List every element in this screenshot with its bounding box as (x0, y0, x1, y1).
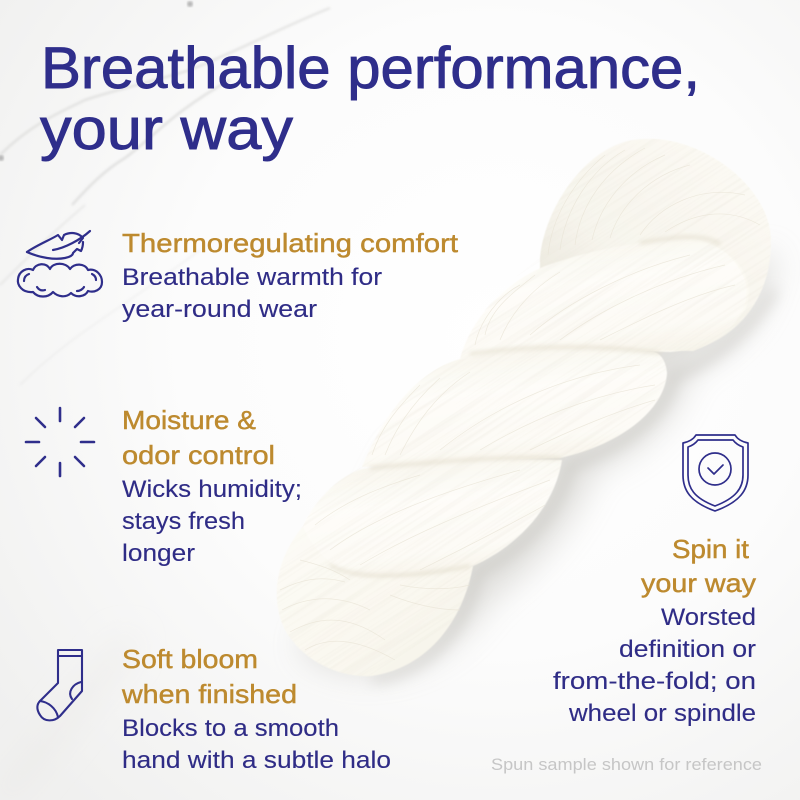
heading: spin it your way: your way (641, 568, 756, 598)
skein shadow (300, 250, 775, 673)
skein fibre strands (280, 148, 760, 660)
heading: soft bloom: when finished (121, 679, 297, 709)
skein right wrap (600, 239, 749, 352)
skein fibre texture (402, 296, 596, 421)
text: soft bloom body: hand with a subtle halo (122, 747, 391, 774)
text: spin it body (553, 604, 756, 727)
text: thermoregulating body: year-round wear (122, 296, 317, 323)
skein top back loop (540, 139, 771, 350)
heading: soft bloom (121, 644, 297, 709)
heading: soft bloom: Soft bloom (122, 644, 258, 674)
title (40, 36, 700, 162)
skein crease shadows (330, 237, 720, 576)
heading: spin it your way: Spin it (672, 534, 750, 564)
heading: thermoregulating comfort: Thermoregulating comfort (122, 228, 459, 258)
skein contact shadow (372, 290, 775, 680)
icon: shield with check (683, 435, 748, 511)
heading: moisture and odor control: odor control (122, 440, 275, 470)
skein bottom loop (277, 526, 473, 676)
heading: moisture and odor control (122, 405, 275, 470)
icon: feather over cloud (18, 231, 102, 296)
skein strand 4 (303, 459, 562, 578)
text: moisture body (122, 476, 302, 567)
text: spin it body: Worsted (661, 604, 756, 631)
text: soft bloom body: Blocks to a smooth (122, 715, 339, 742)
skein strand 2 (460, 239, 747, 359)
text: thermoregulating body (122, 264, 382, 323)
skein strand 3 (362, 348, 667, 467)
icon: sock (37, 650, 82, 720)
text: thermoregulating body: Breathable warmth for (122, 264, 382, 291)
heading: spin it your way (641, 534, 756, 598)
caption: Spun sample shown for reference (491, 756, 762, 774)
text: soft bloom body (122, 715, 391, 774)
yarn skein photo (277, 139, 783, 689)
text: moisture body: longer (122, 540, 195, 567)
text: spin it body: from-the-fold; on (553, 668, 756, 695)
text: moisture body: stays fresh (122, 508, 245, 535)
text: spin it body: definition or (619, 636, 756, 663)
text: spin it body: wheel or spindle (568, 700, 756, 727)
text: moisture body: Wicks humidity; (122, 476, 302, 503)
title: Breathable performance, (41, 36, 700, 101)
title: your way (40, 97, 293, 162)
icon: burst (26, 408, 94, 476)
heading: moisture and odor control: Moisture & (122, 405, 256, 435)
